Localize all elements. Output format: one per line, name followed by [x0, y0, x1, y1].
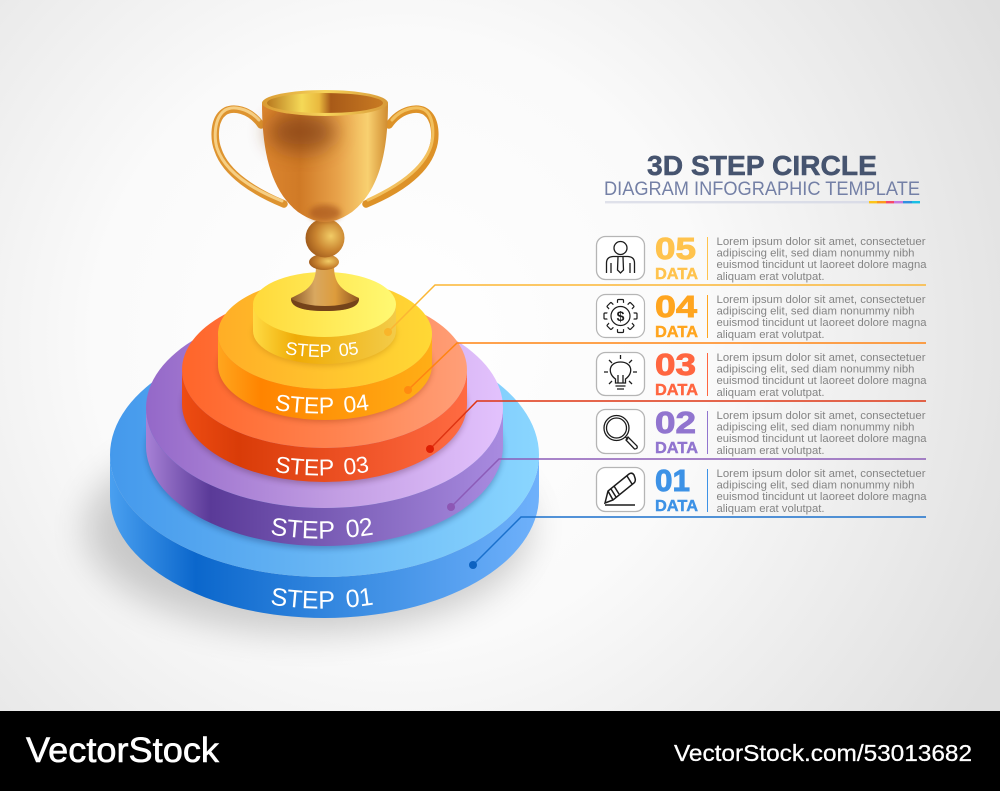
number 04: 04 [655, 289, 698, 324]
trophy collar [309, 254, 339, 270]
trophy rim [262, 90, 388, 116]
row 01 [596, 463, 927, 515]
description: euismod tincidunt ut laoreet dolore magna [716, 433, 927, 445]
row 03 [596, 347, 927, 399]
label: step 01: STEP 01 [272, 588, 373, 609]
trophy foot [291, 266, 359, 311]
description: Lorem ipsum dolor sit amet, consectetuer [716, 352, 926, 364]
label DATA: DATA [655, 440, 698, 457]
icon: magnifying glass [596, 410, 644, 454]
description: aliquam erat volutpat. [716, 387, 824, 399]
row 02 [596, 405, 927, 457]
label DATA: DATA [655, 498, 698, 515]
description: euismod tincidunt ut laoreet dolore magna [716, 259, 927, 271]
label: step 02: STEP 02 [272, 518, 373, 539]
description: adipiscing elit, sed diam nonummy nibh [716, 306, 914, 318]
footer image id: VectorStock.com/53013682 [674, 740, 972, 766]
row 05 [596, 231, 927, 283]
description: Lorem ipsum dolor sit amet, consectetuer [716, 294, 926, 306]
icon: person with tie [596, 236, 644, 280]
icon: gear with dollar: $ [617, 308, 625, 324]
number 01: 01 [655, 463, 690, 498]
subtitle: DIAGRAM INFOGRAPHIC TEMPLATE [604, 179, 920, 200]
trophy cup [262, 103, 388, 222]
label DATA: DATA [655, 266, 698, 283]
description: aliquam erat volutpat. [716, 329, 824, 341]
description: adipiscing elit, sed diam nonummy nibh [716, 364, 914, 376]
trophy ball stem [306, 218, 344, 258]
disc: step 05 [253, 272, 396, 364]
icon: gear with dollar [596, 294, 644, 338]
footer brand: VectorStock [26, 731, 220, 770]
disc: step 04 [218, 290, 432, 420]
title: 3D STEP CIRCLE [647, 150, 877, 181]
icon: light bulb [596, 352, 644, 396]
disc: step 01 [110, 382, 539, 618]
description: Lorem ipsum dolor sit amet, consectetuer [716, 468, 926, 480]
number 03: 03 [655, 347, 696, 382]
row 04 [596, 289, 927, 341]
label: step 03: STEP 03 [276, 456, 368, 476]
description: euismod tincidunt ut laoreet dolore magna [716, 491, 927, 503]
description: euismod tincidunt ut laoreet dolore magna [716, 375, 927, 387]
description: euismod tincidunt ut laoreet dolore magna [716, 317, 927, 329]
icon: pencil [596, 468, 644, 512]
label DATA: DATA [655, 382, 698, 399]
number 02: 02 [655, 405, 696, 440]
title underline [605, 201, 920, 203]
label DATA: DATA [655, 324, 698, 341]
trophy handles [215, 108, 435, 204]
footer bar [0, 711, 1000, 791]
label: step 04: STEP 04 [276, 394, 368, 414]
disc: step 03 [182, 314, 467, 482]
description: aliquam erat volutpat. [716, 445, 824, 457]
trophy [215, 90, 435, 311]
disc: step 02 [146, 340, 503, 546]
stepped 3D circle diagram [110, 272, 539, 618]
description: adipiscing elit, sed diam nonummy nibh [716, 480, 914, 492]
description: adipiscing elit, sed diam nonummy nibh [716, 422, 914, 434]
description: adipiscing elit, sed diam nonummy nibh [716, 248, 914, 260]
description: aliquam erat volutpat. [716, 271, 824, 283]
number 05: 05 [655, 231, 696, 266]
description: aliquam erat volutpat. [716, 503, 824, 515]
leader lines [384, 285, 926, 569]
ground shadow [86, 423, 530, 633]
description: Lorem ipsum dolor sit amet, consectetuer [716, 410, 926, 422]
description: Lorem ipsum dolor sit amet, consectetuer [716, 236, 926, 248]
label: step 05: STEP 05 [286, 342, 358, 357]
